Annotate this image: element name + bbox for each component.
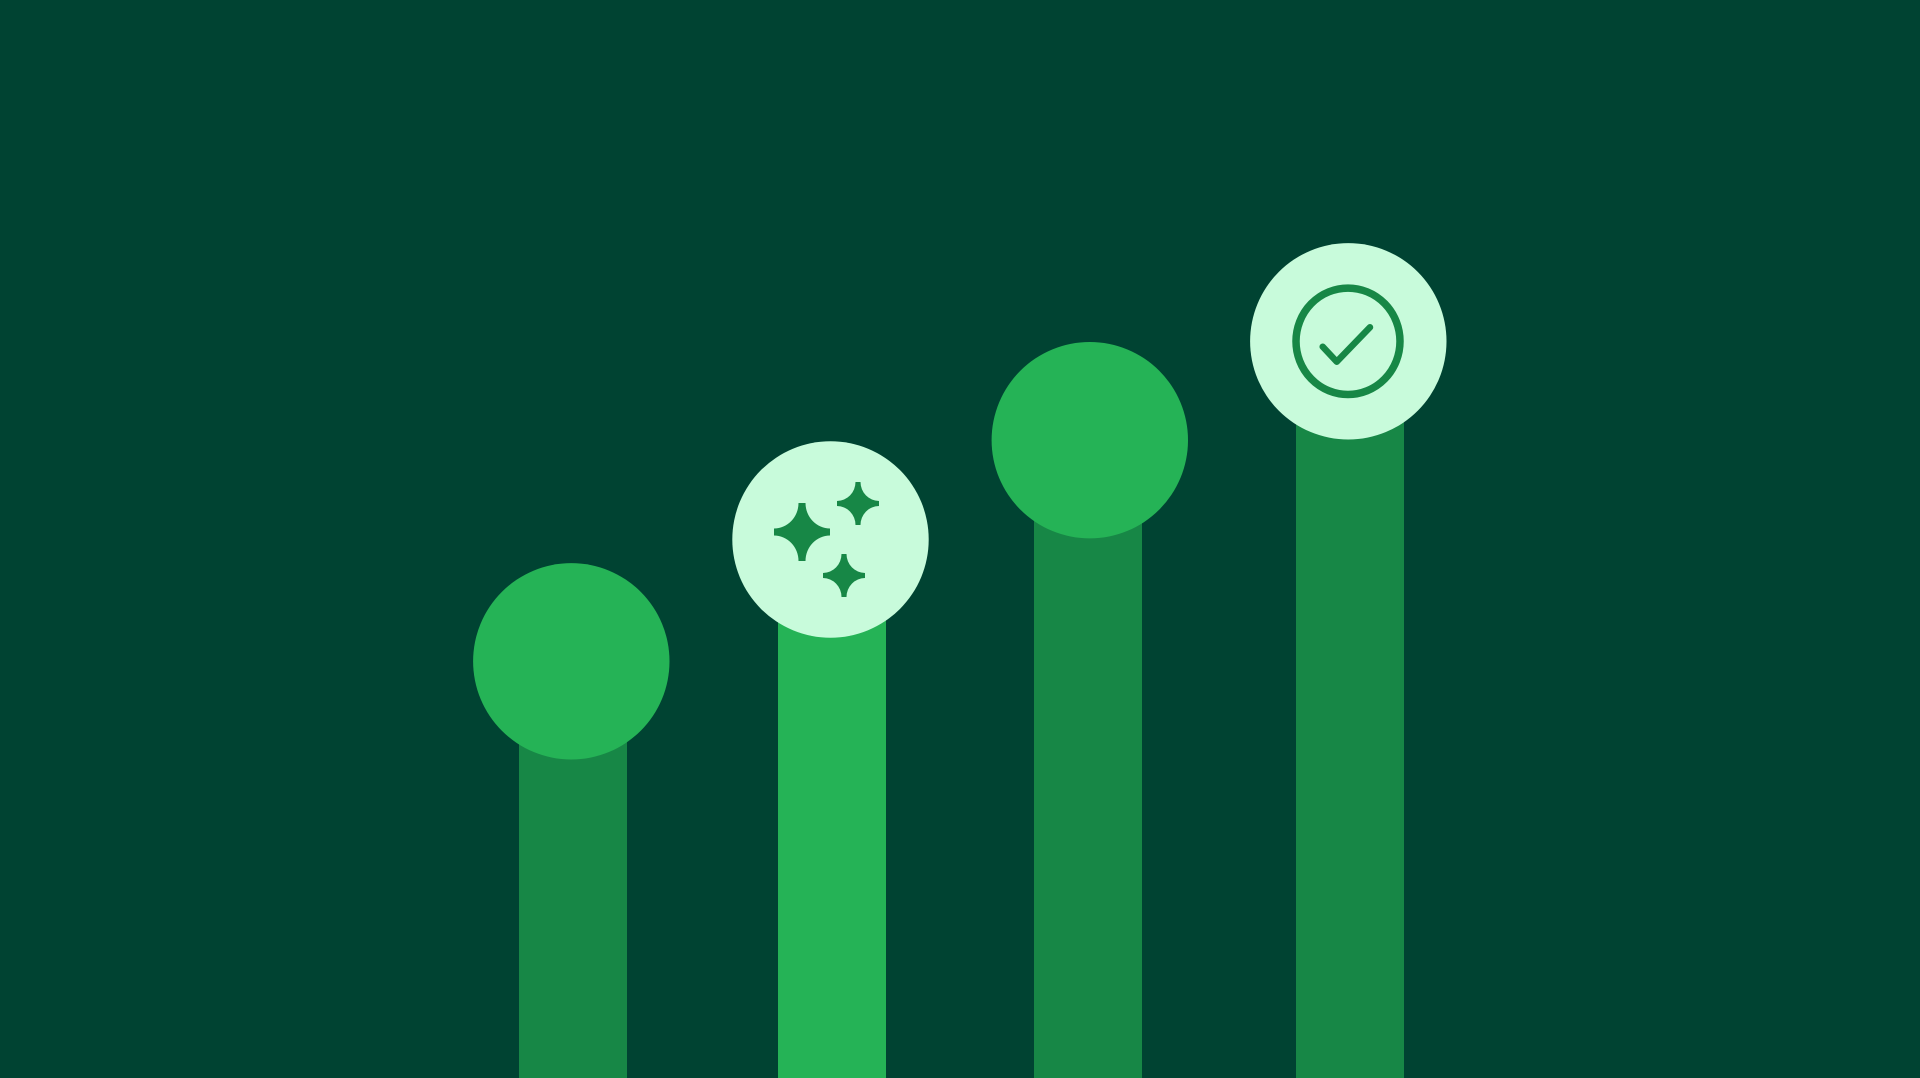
column 1: bar and plain circle (473, 563, 670, 1078)
column 2: bar and circle with sparkles icon (732, 441, 929, 1078)
column 3: bar and plain circle (992, 342, 1188, 1078)
column 4: bar and circle with check icon (1250, 243, 1447, 1078)
icon: check mark in ring (1296, 288, 1400, 394)
icon: sparkles (774, 482, 879, 597)
